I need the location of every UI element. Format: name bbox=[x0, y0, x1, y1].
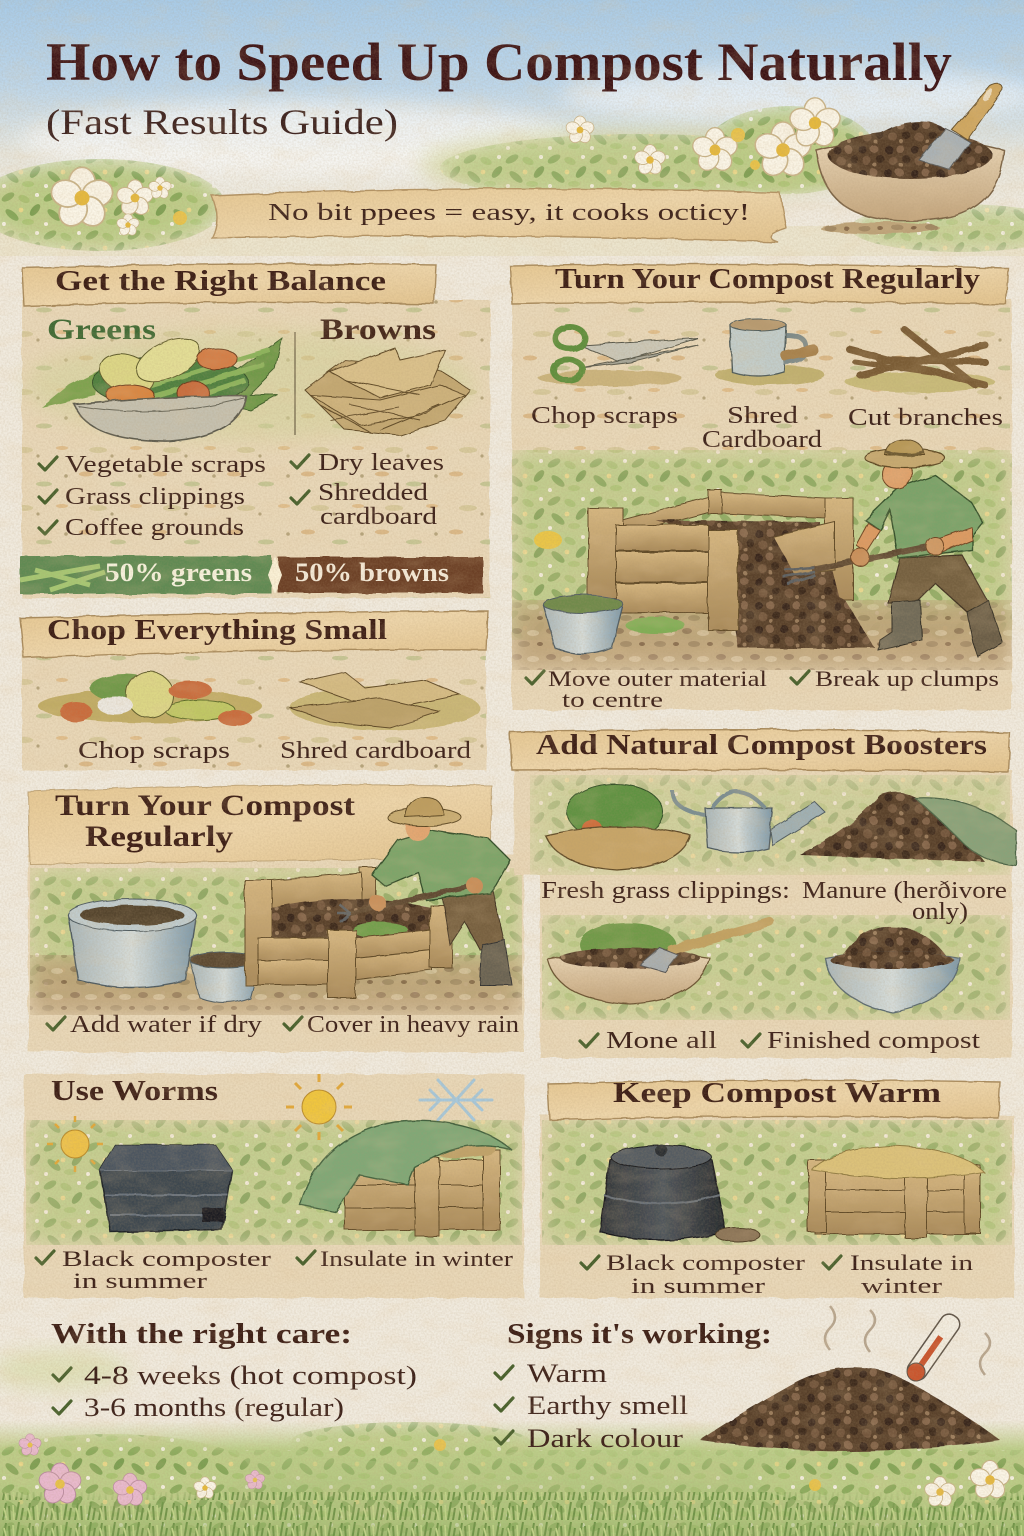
heading: keep compost warm: Keep Compost Warm bbox=[613, 1078, 941, 1109]
text block: signs it's working: Warm bbox=[527, 1359, 607, 1388]
label: shred cardboard: Shred cardboard bbox=[280, 738, 471, 764]
text block: signs it's working: Earthy smell bbox=[527, 1391, 688, 1420]
icon: black composter bbox=[100, 1145, 232, 1232]
subtitle: (Fast Results Guide) bbox=[46, 102, 398, 142]
heading: turn your compost regularly: Regularly bbox=[85, 820, 233, 853]
icon: black round composter bbox=[600, 1144, 760, 1242]
text block: with the right care: With the right care: bbox=[51, 1319, 352, 1350]
labels: prep methods: Shred bbox=[727, 403, 798, 429]
header foliage with compost bowl bbox=[0, 84, 1024, 256]
labels: prep methods: Cut branches bbox=[848, 405, 1003, 431]
icon: white flowers right bbox=[564, 98, 843, 180]
checklist: move and break up bbox=[526, 666, 999, 712]
checklist: warm methods bbox=[581, 1250, 973, 1298]
banner ribbon: No bit ppees = easy, it cooks octicy! bbox=[268, 200, 750, 226]
panel: keep compost warm bbox=[540, 1078, 1014, 1298]
icon: wooden compost bin bbox=[588, 490, 875, 648]
checklist: warm methods: in summer bbox=[631, 1273, 766, 1298]
panel: turn your compost regularly (left) bbox=[28, 785, 524, 1052]
title: How to Speed Up Compost Naturally bbox=[46, 32, 952, 92]
text block: with the right care: 4-8 weeks (hot compost) bbox=[84, 1361, 417, 1390]
checklist: warm methods: Black composter bbox=[606, 1250, 806, 1275]
heading: add natural compost boosters bbox=[510, 730, 1010, 772]
icon: scissors bbox=[538, 327, 698, 386]
label: chop scraps: Chop scraps bbox=[78, 738, 230, 764]
heading: turn your compost regularly: Turn Your Compost Regularly bbox=[555, 264, 980, 295]
labels: prep methods: Cardboard bbox=[702, 427, 822, 453]
icon: compost bowl and trowel bbox=[816, 84, 1004, 221]
icon: mug bbox=[715, 319, 825, 385]
icon: blue tub bbox=[68, 899, 196, 988]
heading: add natural compost boosters: Add Natural Compost Boosters bbox=[536, 730, 987, 761]
checklist: move and break up: to centre bbox=[562, 687, 663, 712]
icon: watering can bbox=[672, 790, 825, 852]
labels: prep methods: Chop scraps bbox=[531, 403, 678, 429]
checklist: warm methods: Insulate in bbox=[850, 1250, 973, 1275]
checklist: greens: Vegetable scraps bbox=[65, 452, 266, 478]
checklist: browns: Dry leaves bbox=[318, 450, 444, 476]
checklist: browns bbox=[291, 450, 444, 530]
text block: with the right care bbox=[51, 1319, 417, 1422]
text block: signs it's working: Dark colour bbox=[527, 1424, 683, 1453]
icon: steaming compost pile with thermometer bbox=[700, 1306, 1000, 1451]
panel: get the right balance bbox=[20, 264, 490, 598]
ratio bar: 50% greens and 50% browns: 50% greens bbox=[105, 558, 252, 587]
heading: keep compost warm bbox=[548, 1078, 1000, 1120]
icon: meadow flowers bbox=[18, 1434, 1012, 1509]
ratio bar: 50% greens and 50% browns: 50% browns bbox=[295, 558, 449, 587]
heading: chop everything small: Chop Everything Small bbox=[47, 615, 387, 646]
icon: farmer turning compost bbox=[783, 440, 1003, 657]
checklist: mix and finish: Finished compost bbox=[767, 1028, 980, 1054]
heading: turn your compost regularly bbox=[28, 785, 492, 864]
banner ribbon bbox=[212, 189, 786, 242]
icon: chopped scraps bbox=[38, 672, 262, 726]
checklist: browns: cardboard bbox=[320, 504, 437, 530]
text block: signs it's working: Signs it's working: bbox=[507, 1319, 772, 1350]
heading: turn your compost regularly: Turn Your Compost bbox=[55, 789, 355, 822]
checklist: water and rain: Add water if dry bbox=[70, 1012, 262, 1038]
checklist: warm methods: winter bbox=[861, 1273, 943, 1298]
icon: sun bbox=[286, 1074, 352, 1140]
checklist: move and break up: Break up clumps bbox=[815, 666, 999, 691]
checklist: browns: Shredded bbox=[318, 480, 428, 506]
scene: garden background bbox=[512, 450, 1012, 670]
checklist: mix and finish: Mone all bbox=[606, 1028, 717, 1054]
icon: small sun bbox=[47, 1116, 103, 1172]
labels: booster ingredients: Manure (herðivore bbox=[802, 878, 1007, 904]
heading: chop everything small bbox=[20, 611, 488, 658]
text block: signs it's working bbox=[495, 1319, 772, 1453]
icon: cardboard pile bbox=[305, 348, 470, 435]
panel: use worms bbox=[24, 1074, 524, 1298]
icon: bowl of finished compost bbox=[825, 927, 960, 1012]
labels: booster ingredients bbox=[541, 878, 1007, 925]
icon: small bucket bbox=[190, 952, 260, 1002]
icon: metal bucket bbox=[543, 595, 685, 654]
checklist: water and rain: Cover in heavy rain bbox=[307, 1012, 519, 1038]
checklist: composter and insulation: Black composter bbox=[62, 1246, 272, 1271]
checklist: greens: Coffee grounds bbox=[65, 515, 244, 541]
ratio bar: 50% greens and 50% browns bbox=[20, 556, 483, 594]
icon: white flowers left bbox=[48, 167, 187, 237]
icon: mixing bowl and trowel bbox=[548, 922, 770, 1004]
heading: greens: Greens bbox=[47, 313, 156, 346]
icon: straw covered crate bbox=[808, 1146, 984, 1238]
heading: turn your compost regularly bbox=[510, 264, 1008, 304]
labels: booster ingredients: Fresh grass clippings: bbox=[541, 878, 790, 904]
icon: crate under tarp bbox=[300, 1121, 512, 1236]
labels: booster ingredients: only) bbox=[912, 899, 968, 925]
icon: farmer with fork bbox=[337, 797, 512, 985]
icon: manure pile with tarp bbox=[800, 792, 1016, 865]
icon: snowflake bbox=[420, 1080, 492, 1120]
checklist: composter and insulation: in summer bbox=[73, 1268, 208, 1293]
heading: get the right balance: Get the Right Balance bbox=[55, 266, 386, 297]
checklist: composter and insulation bbox=[36, 1246, 514, 1293]
checklist: composter and insulation: Insulate in winter bbox=[320, 1246, 514, 1271]
heading: get the right balance bbox=[22, 264, 436, 306]
checklist: mix and finish bbox=[580, 1028, 980, 1054]
panel: turn your compost regularly (right) bbox=[510, 264, 1012, 712]
checklist: water and rain bbox=[47, 1012, 519, 1038]
icon: bowl of greens bbox=[42, 329, 282, 441]
labels: prep methods bbox=[531, 403, 1003, 453]
icon: branches bbox=[845, 330, 995, 392]
heading: use worms: Use Worms bbox=[51, 1076, 218, 1107]
checklist: greens bbox=[39, 452, 266, 541]
heading: browns: Browns bbox=[320, 313, 436, 346]
panel: add natural compost boosters bbox=[510, 730, 1016, 1058]
panel: chop everything small bbox=[20, 611, 488, 770]
checklist: greens: Grass clippings bbox=[65, 484, 245, 510]
icon: basket of greens bbox=[545, 784, 690, 870]
footer meadow bbox=[0, 1350, 1024, 1536]
icon: wooden compost crate bbox=[245, 868, 452, 998]
text block: with the right care: 3-6 months (regular) bbox=[84, 1393, 344, 1422]
checklist: move and break up: Move outer material bbox=[548, 666, 767, 691]
icon: shredded cardboard bbox=[290, 672, 480, 730]
